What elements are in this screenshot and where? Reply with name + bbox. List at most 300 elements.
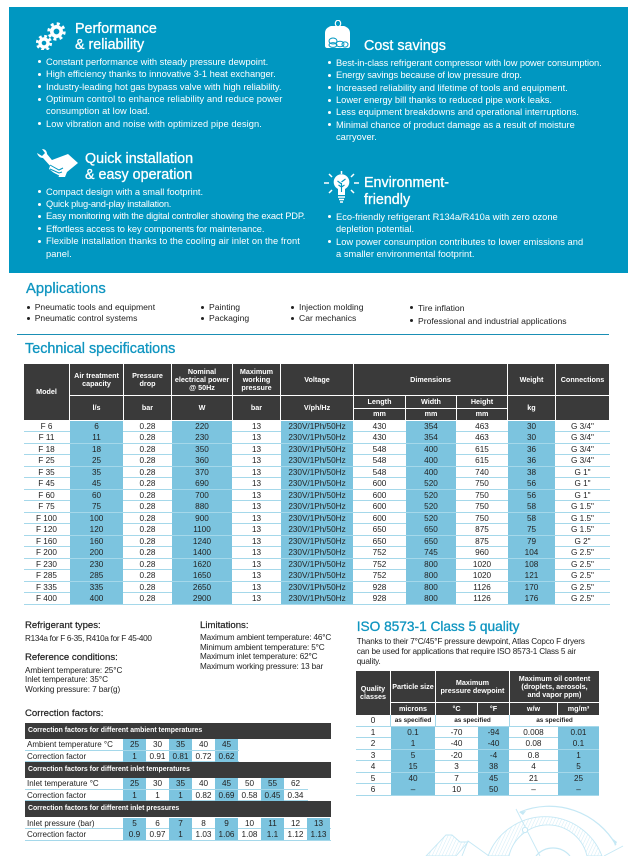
section: ambient temperatures bbox=[25, 723, 331, 762]
table body: 0.1 bbox=[573, 739, 584, 748]
panel: applications bbox=[17, 279, 609, 335]
table body: 1100 bbox=[193, 525, 211, 534]
table body: as specified bbox=[395, 717, 431, 724]
table header: Air treatment bbox=[74, 370, 119, 380]
table body: 13 bbox=[252, 560, 261, 568]
section: ambient temperatures: 25 bbox=[130, 740, 139, 749]
bullet list: panel. bbox=[46, 249, 72, 259]
table header: V/ph/Hz bbox=[304, 403, 330, 412]
table body: 0.1 bbox=[407, 728, 419, 736]
heading bbox=[75, 20, 157, 53]
section: inlet pressures: 1.13 bbox=[311, 830, 326, 839]
table body: 5 bbox=[411, 750, 415, 760]
table body: 285 bbox=[90, 571, 103, 580]
table header: Nominal bbox=[188, 366, 216, 376]
table body: 79 bbox=[527, 536, 536, 546]
table header: l/s bbox=[92, 403, 100, 412]
table body: 0.28 bbox=[140, 479, 155, 488]
section: inlet pressures: Correction factor bbox=[27, 830, 86, 839]
table body: 100 bbox=[90, 514, 103, 522]
table header: Maximum bbox=[240, 366, 273, 376]
section: ambient temperatures: Ambient temperature °C bbox=[27, 740, 113, 749]
table body: 170 bbox=[525, 582, 538, 592]
table body: F 11 bbox=[39, 433, 54, 442]
table body: F 335 bbox=[36, 582, 57, 592]
table body: 2900 bbox=[193, 594, 211, 603]
bullet list: consumption at low load. bbox=[46, 106, 150, 116]
table body: G 2.5" bbox=[571, 582, 594, 592]
heading: Cost savings bbox=[364, 38, 446, 54]
table header: Maximum oil content bbox=[519, 674, 590, 682]
table body: 13 bbox=[252, 548, 261, 557]
table header: Model bbox=[36, 387, 57, 396]
table body: 1650 bbox=[193, 571, 211, 580]
section: inlet pressures bbox=[25, 801, 331, 841]
table body: 11 bbox=[92, 433, 101, 442]
table body: 36 bbox=[527, 456, 536, 465]
table body: 21 bbox=[529, 774, 538, 782]
table body: -70 bbox=[451, 728, 462, 736]
table body: 230V/1Ph/50Hz bbox=[288, 560, 346, 568]
table: ISO quality classes bbox=[356, 671, 599, 796]
table body: 880 bbox=[195, 502, 209, 511]
table body: 650 bbox=[424, 525, 438, 534]
applications list column 4 bbox=[410, 302, 567, 326]
text block: limitations: Maximum ambient temperature: 46°C bbox=[200, 633, 331, 642]
section: ambient temperatures: 40 bbox=[199, 740, 208, 749]
section: inlet temperatures: 0.34 bbox=[288, 790, 303, 800]
table body: 230V/1Ph/50Hz bbox=[288, 444, 346, 454]
bullet list: Constant performance with steady pressure dewpoint. bbox=[46, 57, 268, 67]
heading bbox=[364, 175, 449, 208]
table body: 400 bbox=[424, 444, 438, 454]
section: inlet temperatures: 30 bbox=[153, 779, 162, 788]
table body: G 2.5" bbox=[571, 571, 594, 580]
table body: 700 bbox=[195, 490, 209, 500]
table: technical specifications bbox=[24, 364, 610, 605]
table header: capacity bbox=[82, 378, 111, 388]
table body: 230V/1Ph/50Hz bbox=[288, 548, 346, 557]
table body: -40 bbox=[488, 739, 499, 748]
section: inlet temperatures: 50 bbox=[245, 779, 254, 788]
table body: 230V/1Ph/50Hz bbox=[288, 502, 346, 511]
table header: w/w bbox=[527, 704, 540, 713]
table header: @ 50Hz bbox=[189, 382, 215, 392]
table body: G 3/4" bbox=[571, 444, 594, 454]
table header: Connections bbox=[561, 374, 604, 384]
section: inlet pressures: 1.03 bbox=[196, 830, 211, 839]
section: ambient temperatures: 45 bbox=[222, 740, 231, 749]
bullet list: Low vibration and noise with optimized pipe design. bbox=[46, 119, 262, 129]
table body: 13 bbox=[252, 536, 261, 546]
section: inlet pressures: Correction factors for different inlet pressures bbox=[28, 805, 179, 812]
bullet list: Optimum control to enhance reliability and reduce power bbox=[46, 94, 282, 104]
bullet list: Best-in-class refrigerant compressor with low power consumption. bbox=[336, 58, 602, 68]
table body: 0.08 bbox=[526, 739, 541, 748]
table body: 38 bbox=[527, 468, 536, 476]
section: inlet pressures: 13 bbox=[314, 818, 323, 828]
table body: 13 bbox=[252, 582, 261, 592]
table body: 13 bbox=[252, 433, 261, 442]
table header: mm bbox=[373, 409, 386, 418]
table body: 0.01 bbox=[571, 728, 586, 736]
table header: bar bbox=[142, 403, 153, 412]
table body: F 45 bbox=[38, 479, 55, 488]
section: inlet pressures: 8 bbox=[201, 818, 206, 828]
table body: F 400 bbox=[36, 594, 57, 603]
table body: 230V/1Ph/50Hz bbox=[288, 525, 346, 534]
table body: 600 bbox=[373, 479, 386, 488]
bullet list: Eco-friendly refrigerant R134a/R410a with zero ozone bbox=[336, 212, 558, 222]
table body: 45 bbox=[489, 774, 498, 782]
table body: 1020 bbox=[473, 571, 491, 580]
section: inlet temperatures bbox=[25, 762, 331, 801]
section: inlet temperatures: 40 bbox=[199, 779, 208, 788]
table body: 6 bbox=[371, 785, 375, 794]
section: inlet pressures: 7 bbox=[178, 818, 183, 828]
table body: G 3/4" bbox=[571, 422, 594, 430]
table body: F 160 bbox=[36, 536, 57, 546]
table body: 335 bbox=[90, 582, 103, 592]
table header: Voltage bbox=[304, 374, 330, 384]
table body: 3 bbox=[371, 750, 375, 760]
section: inlet temperatures: 25 bbox=[130, 779, 139, 788]
section: inlet pressures: 0.97 bbox=[150, 830, 165, 839]
table body: 750 bbox=[475, 514, 489, 522]
table body: 520 bbox=[424, 479, 438, 488]
section: inlet pressures: 1.1 bbox=[267, 830, 278, 839]
table body: 0.8 bbox=[528, 750, 539, 760]
text block: ISO description: can be used for applications that require ISO 8573-1 Class 5 air bbox=[357, 647, 576, 656]
table header: kg bbox=[527, 403, 536, 412]
table body: 430 bbox=[373, 422, 386, 430]
table header: and vapor ppm) bbox=[528, 690, 581, 698]
table body: 230V/1Ph/50Hz bbox=[288, 536, 346, 546]
table body: 230 bbox=[195, 433, 209, 442]
table body: 0.28 bbox=[140, 560, 155, 568]
table body: 13 bbox=[252, 594, 261, 603]
section: ambient temperatures: Correction factor bbox=[27, 752, 86, 760]
table body: 120 bbox=[90, 525, 103, 534]
table body: 690 bbox=[195, 479, 209, 488]
section: inlet temperatures: 45 bbox=[222, 779, 231, 788]
bullet list bbox=[328, 212, 583, 259]
table body: 750 bbox=[475, 479, 489, 488]
table body: 230V/1Ph/50Hz bbox=[288, 490, 346, 500]
table body: 25 bbox=[92, 456, 101, 465]
text block: reference conditions bbox=[25, 652, 122, 694]
table body: 0.28 bbox=[140, 433, 155, 442]
table body: 600 bbox=[373, 514, 386, 522]
bullet list: Lower energy bill thanks to reduced pipe work leaks. bbox=[336, 95, 552, 105]
table body: 600 bbox=[373, 490, 386, 500]
table header: °C bbox=[452, 704, 461, 713]
table body: 1 bbox=[411, 739, 415, 748]
table body: 108 bbox=[525, 560, 538, 568]
table body: 752 bbox=[373, 571, 386, 580]
table body: 56 bbox=[527, 479, 536, 488]
heading: technical specifications: Technical specifications bbox=[25, 341, 175, 357]
section: inlet temperatures: 1 bbox=[155, 790, 160, 800]
table header: Height bbox=[471, 397, 493, 406]
section: inlet temperatures: 0.58 bbox=[242, 790, 257, 800]
table body: 13 bbox=[252, 490, 261, 500]
table body: 0.28 bbox=[140, 422, 155, 430]
table body: 230V/1Ph/50Hz bbox=[288, 479, 346, 488]
table body: 0.28 bbox=[140, 536, 155, 546]
table body: 0.28 bbox=[140, 514, 155, 522]
table body: 463 bbox=[475, 433, 489, 442]
table body: 1240 bbox=[193, 536, 211, 546]
section: inlet temperatures: Correction factors for different inlet temperatures bbox=[28, 766, 190, 773]
table body: 18 bbox=[92, 444, 101, 454]
table body: 75 bbox=[527, 525, 536, 534]
text block: limitations: Maximum working pressure: 13 bar bbox=[200, 662, 323, 671]
table body: G 1" bbox=[574, 479, 591, 488]
section: inlet pressures: 10 bbox=[245, 818, 254, 828]
bullet list: Quick plug-and-play installation. bbox=[46, 199, 171, 209]
table body: 4 bbox=[531, 762, 536, 771]
table body: 60 bbox=[92, 490, 101, 500]
bullet list: Compact design with a small footprint. bbox=[46, 186, 203, 196]
background technical drawing watermark bbox=[426, 806, 624, 856]
table header: Particle size bbox=[392, 682, 434, 690]
table body: 928 bbox=[373, 582, 386, 592]
table header bbox=[356, 671, 599, 715]
table body: 900 bbox=[195, 514, 209, 522]
heading: ISO 8573-1 Class 5 quality: ISO 8573-1 Class 5 quality bbox=[357, 619, 520, 634]
text block: ISO description bbox=[356, 637, 585, 666]
icon: gears bbox=[36, 22, 66, 50]
table body: 38 bbox=[489, 762, 498, 771]
text block: refrigerant types bbox=[25, 620, 152, 642]
section: inlet temperatures: Inlet temperature °C bbox=[27, 779, 99, 788]
panel: quick installation bbox=[37, 149, 305, 259]
table header: Weight bbox=[520, 374, 543, 384]
table body: 520 bbox=[424, 514, 438, 522]
bullet list: a smaller environmental footprint. bbox=[336, 249, 474, 259]
table body: 3 bbox=[454, 762, 459, 771]
table header: Width bbox=[421, 397, 441, 406]
table body: 875 bbox=[475, 525, 489, 534]
table body: 750 bbox=[475, 502, 489, 511]
table header: Maximum bbox=[456, 678, 489, 686]
table header: microns bbox=[399, 704, 427, 713]
text block: limitations: Minimum ambient temperature: 5°C bbox=[200, 643, 325, 652]
table body: as specified bbox=[454, 717, 491, 724]
table body: 0.28 bbox=[140, 444, 155, 454]
table body: – bbox=[411, 785, 415, 794]
heading: & reliability bbox=[75, 37, 144, 53]
table body: 548 bbox=[373, 468, 386, 476]
table body: 615 bbox=[475, 456, 489, 465]
heading: Environment- bbox=[364, 175, 449, 191]
table body: 354 bbox=[424, 422, 438, 430]
section: ambient temperatures: 0.72 bbox=[196, 752, 211, 760]
heading: Performance bbox=[75, 20, 157, 36]
table: correction factors bbox=[25, 723, 331, 841]
table body: 230V/1Ph/50Hz bbox=[288, 514, 346, 522]
applications list column 4: Professional and industrial applications bbox=[418, 316, 567, 326]
table body: -40 bbox=[451, 739, 462, 748]
section: inlet temperatures: 35 bbox=[176, 779, 185, 788]
table body: 960 bbox=[475, 548, 489, 557]
bullet list bbox=[38, 186, 305, 259]
table header: Dimensions bbox=[410, 374, 451, 384]
table body: 1 bbox=[371, 728, 375, 736]
applications list column 2: Painting bbox=[209, 302, 240, 312]
table body: 750 bbox=[475, 490, 489, 500]
section: ambient temperatures: 30 bbox=[153, 740, 162, 749]
table body: 650 bbox=[373, 525, 386, 534]
table body: 45 bbox=[92, 479, 101, 488]
table body: as specified bbox=[536, 717, 573, 724]
table body: 548 bbox=[373, 456, 386, 465]
panel: product benefits bbox=[9, 7, 628, 273]
table header: mg/m³ bbox=[568, 704, 589, 713]
table body: -94 bbox=[488, 728, 499, 736]
table body: 230V/1Ph/50Hz bbox=[288, 582, 346, 592]
table body: 360 bbox=[195, 456, 209, 465]
table header: working bbox=[243, 374, 270, 384]
table body: G 1" bbox=[574, 490, 591, 500]
table body: 0 bbox=[371, 716, 375, 725]
table body: F 230 bbox=[36, 560, 57, 568]
bullet list: Less equipment breakdowns and operational interruptions. bbox=[336, 107, 579, 117]
table body: 0.28 bbox=[140, 490, 155, 500]
table body: 13 bbox=[252, 468, 261, 476]
table body: 0.28 bbox=[140, 582, 155, 592]
table body: – bbox=[576, 785, 581, 794]
applications list column 4: Tire inflation bbox=[418, 302, 464, 312]
table body: 400 bbox=[424, 456, 438, 465]
text block: reference conditions: Reference conditions: bbox=[25, 652, 118, 663]
table body: -20 bbox=[451, 750, 462, 760]
icon: jar of coins bbox=[325, 20, 350, 48]
bullet list: High efficiency thanks to innovative 3-1 heat exchanger. bbox=[46, 69, 276, 79]
table body: 928 bbox=[373, 594, 386, 603]
text block: refrigerant types: Refrigerant types: bbox=[25, 620, 101, 631]
table body: 6 bbox=[94, 422, 99, 430]
heading: friendly bbox=[364, 192, 410, 208]
section: inlet pressures: 11 bbox=[268, 818, 277, 828]
heading: Applications bbox=[26, 281, 106, 297]
table body bbox=[356, 715, 599, 796]
icon: light bulb with plant bbox=[324, 171, 359, 203]
heading bbox=[85, 150, 193, 183]
table body: G 1" bbox=[574, 468, 591, 476]
table header: Quality bbox=[361, 684, 385, 693]
applications list column 2: Packaging bbox=[209, 312, 249, 322]
table body: 13 bbox=[252, 514, 261, 522]
table body bbox=[24, 421, 610, 605]
table body: 4 bbox=[371, 762, 375, 771]
table body: F 75 bbox=[38, 502, 55, 511]
section: ambient temperatures: 0.91 bbox=[150, 752, 165, 760]
table body: 0.008 bbox=[523, 728, 544, 736]
table body: 13 bbox=[252, 422, 261, 430]
section: ambient temperatures: 1 bbox=[132, 752, 137, 760]
table body: 1020 bbox=[473, 560, 491, 568]
table body: 1126 bbox=[473, 582, 491, 592]
table header: W bbox=[199, 403, 205, 412]
table body: 50 bbox=[489, 785, 498, 794]
panel: performance and reliability bbox=[36, 20, 282, 129]
bullet list bbox=[38, 57, 282, 129]
table body: 0.28 bbox=[140, 502, 155, 511]
table body: 740 bbox=[475, 468, 489, 476]
text block: limitations bbox=[200, 620, 331, 671]
panel: environment-friendly bbox=[324, 171, 583, 259]
table body: 230V/1Ph/50Hz bbox=[288, 433, 346, 442]
table header bbox=[24, 364, 609, 420]
table body: 370 bbox=[195, 468, 209, 476]
table header: mm bbox=[425, 409, 437, 418]
section: inlet pressures: 1 bbox=[178, 830, 183, 839]
table body: 1620 bbox=[193, 560, 211, 568]
table body: 15 bbox=[408, 762, 418, 771]
table body: G 2.5" bbox=[571, 560, 594, 568]
table body: 0.28 bbox=[140, 571, 155, 580]
table header: °F bbox=[490, 704, 497, 713]
text block: reference conditions: Working pressure: 7 bar(g) bbox=[25, 685, 120, 694]
applications list column 1: Pneumatic tools and equipment bbox=[35, 302, 155, 312]
text block: reference conditions: Inlet temperature: 35°C bbox=[25, 675, 108, 684]
section: inlet temperatures: 0.45 bbox=[265, 790, 280, 800]
table body: 752 bbox=[373, 548, 386, 557]
section: inlet temperatures: 0.69 bbox=[219, 790, 234, 800]
table header: drop bbox=[140, 378, 155, 388]
section: ambient temperatures: 35 bbox=[176, 740, 185, 749]
table body: 2 bbox=[371, 739, 375, 748]
table body: -4 bbox=[490, 750, 497, 760]
table body: 104 bbox=[525, 548, 538, 557]
table header: pressure bbox=[241, 382, 272, 392]
section: inlet pressures: Inlet pressure (bar) bbox=[27, 818, 95, 828]
table body: 400 bbox=[424, 468, 438, 476]
table body: 875 bbox=[475, 536, 489, 546]
table body: 1 bbox=[576, 750, 581, 760]
table body: 13 bbox=[252, 444, 261, 454]
table header: (droplets, aerosols, bbox=[521, 682, 588, 690]
table header: Length bbox=[368, 397, 391, 406]
heading: & easy operation bbox=[85, 167, 192, 183]
table body: 10 bbox=[452, 785, 461, 794]
applications list column 1 bbox=[27, 302, 156, 322]
table body: 400 bbox=[90, 594, 103, 603]
table body: 30 bbox=[527, 422, 536, 430]
table body: 56 bbox=[527, 490, 536, 500]
section: inlet pressures: 0.9 bbox=[129, 830, 140, 839]
table body: – bbox=[531, 785, 536, 794]
section: inlet pressures: 9 bbox=[224, 818, 229, 828]
table body: G 1.5" bbox=[571, 514, 594, 522]
table body: F 6 bbox=[41, 422, 52, 430]
table body: F 120 bbox=[36, 525, 57, 534]
table header: electrical power bbox=[175, 374, 229, 384]
table body: 650 bbox=[373, 536, 386, 546]
bullet list: Easy monitoring with the digital controller showing the exact PDP. bbox=[46, 211, 305, 221]
table body: 800 bbox=[424, 571, 438, 580]
table body: 0.28 bbox=[140, 594, 155, 603]
table header: mm bbox=[476, 409, 488, 418]
section: inlet pressures: 1.12 bbox=[288, 830, 303, 839]
section: inlet temperatures: 1 bbox=[178, 790, 183, 800]
table body: 13 bbox=[252, 525, 261, 534]
table body: 35 bbox=[92, 468, 101, 476]
table body: F 285 bbox=[36, 571, 57, 580]
applications list column 1: Pneumatic control systems bbox=[35, 312, 137, 322]
